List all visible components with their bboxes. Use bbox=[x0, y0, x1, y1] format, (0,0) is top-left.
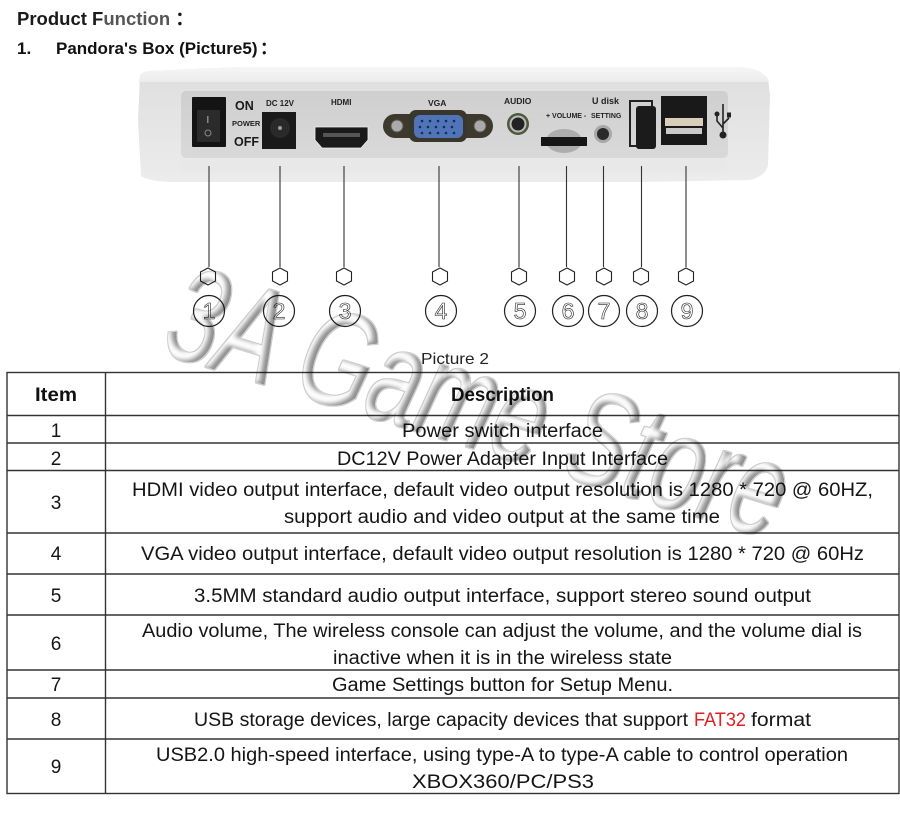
callouts: numbered circles: 9 bbox=[681, 298, 693, 324]
device: rear panel photo bbox=[138, 67, 770, 182]
row 8: format bbox=[751, 710, 812, 731]
USB symbol bbox=[715, 104, 730, 138]
row 3: support audio and video output at the same time bbox=[284, 507, 720, 528]
row 7: Game Settings button for Setup Menu. bbox=[332, 675, 673, 696]
callouts: numbered circles: 1 bbox=[203, 298, 215, 324]
HDMI port bbox=[315, 98, 368, 148]
power labels: ON bbox=[235, 99, 254, 113]
setting button bbox=[591, 96, 622, 143]
table: item descriptions bbox=[7, 372, 899, 794]
volume dial bbox=[541, 113, 587, 153]
row 6: inactive when it is in the wireless state bbox=[333, 648, 672, 669]
row 5: 5 bbox=[51, 586, 61, 607]
row 1 bbox=[51, 421, 603, 442]
row 9: USB2.0 high-speed interface, using type-A to type-A cable to control operation bbox=[156, 745, 848, 766]
DC jack bbox=[262, 99, 296, 149]
row 3: HDMI video output interface, default video output resolution is 1280 * 720 @ 60HZ, bbox=[132, 480, 873, 501]
row 2 bbox=[51, 449, 668, 470]
power labels bbox=[232, 99, 261, 149]
audio jack: AUDIO bbox=[504, 96, 532, 106]
callouts: numbered circles: 5 bbox=[514, 298, 526, 324]
device body bbox=[138, 67, 770, 182]
VGA port bbox=[383, 98, 493, 142]
heading: Pandora's Box: Pandora's Box (Picture5) bbox=[56, 39, 258, 58]
power labels: OFF bbox=[234, 135, 259, 149]
table header: Description bbox=[451, 385, 554, 406]
callouts: numbered circles: 7 bbox=[598, 298, 610, 324]
row 3: 3 bbox=[51, 493, 61, 514]
callouts: numbered circles: 4 bbox=[435, 298, 448, 324]
audio jack bbox=[504, 96, 532, 135]
row 1: Power switch interface bbox=[402, 421, 603, 442]
row 7 bbox=[51, 675, 673, 696]
connector panel bbox=[181, 91, 728, 158]
power labels: POWER bbox=[232, 119, 261, 128]
row 7: 7 bbox=[51, 675, 61, 696]
table grid bbox=[7, 372, 899, 794]
table header bbox=[35, 385, 554, 406]
row 5: 3.5MM standard audio output interface, support stereo sound output bbox=[194, 586, 812, 607]
callouts: connector lines and hexagon markers bbox=[200, 166, 694, 285]
callouts: numbered circles bbox=[194, 296, 702, 326]
row 4: 4 bbox=[51, 544, 62, 565]
dual USB port bbox=[661, 96, 707, 145]
volume dial: + VOLUME - bbox=[546, 113, 587, 120]
row 9: XBOX360/PC/PS3 bbox=[412, 772, 594, 793]
callouts: numbered circles: 3 bbox=[339, 298, 351, 324]
VGA port: VGA bbox=[428, 98, 446, 108]
row 8 bbox=[51, 710, 812, 731]
row 4: VGA video output interface, default video output resolution is 1280 * 720 @ 60Hz bbox=[141, 544, 864, 565]
row 8: FAT32 bbox=[694, 710, 746, 731]
row 6: Audio volume, The wireless console can adjust the volume, and the volume dial is bbox=[142, 621, 862, 642]
row 9: 9 bbox=[51, 757, 61, 778]
callouts: numbered circles: 8 bbox=[636, 298, 648, 324]
row 2: DC12V Power Adapter Input Interface bbox=[337, 449, 668, 470]
row 9 bbox=[51, 745, 848, 793]
row 6 bbox=[51, 621, 862, 669]
HDMI port: HDMI bbox=[331, 98, 351, 107]
callouts: numbered circles: 6 bbox=[562, 298, 574, 324]
USB storage device bbox=[630, 101, 656, 149]
row 3 bbox=[51, 480, 873, 528]
row 2: 2 bbox=[51, 449, 61, 470]
heading: Pandora's Box: ： bbox=[260, 39, 277, 58]
callouts: numbered circles: 2 bbox=[273, 298, 285, 324]
row 1: 1 bbox=[51, 421, 61, 442]
setting button: U disk bbox=[592, 96, 620, 106]
table header: Item bbox=[35, 385, 77, 406]
setting button: SETTING bbox=[591, 113, 622, 120]
title: product function: Product Function ： bbox=[17, 8, 194, 29]
row 8: USB storage devices, large capacity devices that support bbox=[194, 710, 689, 731]
caption: Picture 2: Picture 2 bbox=[421, 351, 489, 368]
heading: Pandora's Box: 1. bbox=[17, 39, 31, 58]
row 8: 8 bbox=[51, 710, 61, 731]
row 6: 6 bbox=[51, 634, 61, 655]
DC jack: DC 12V bbox=[266, 99, 295, 108]
power switch bbox=[192, 97, 226, 147]
